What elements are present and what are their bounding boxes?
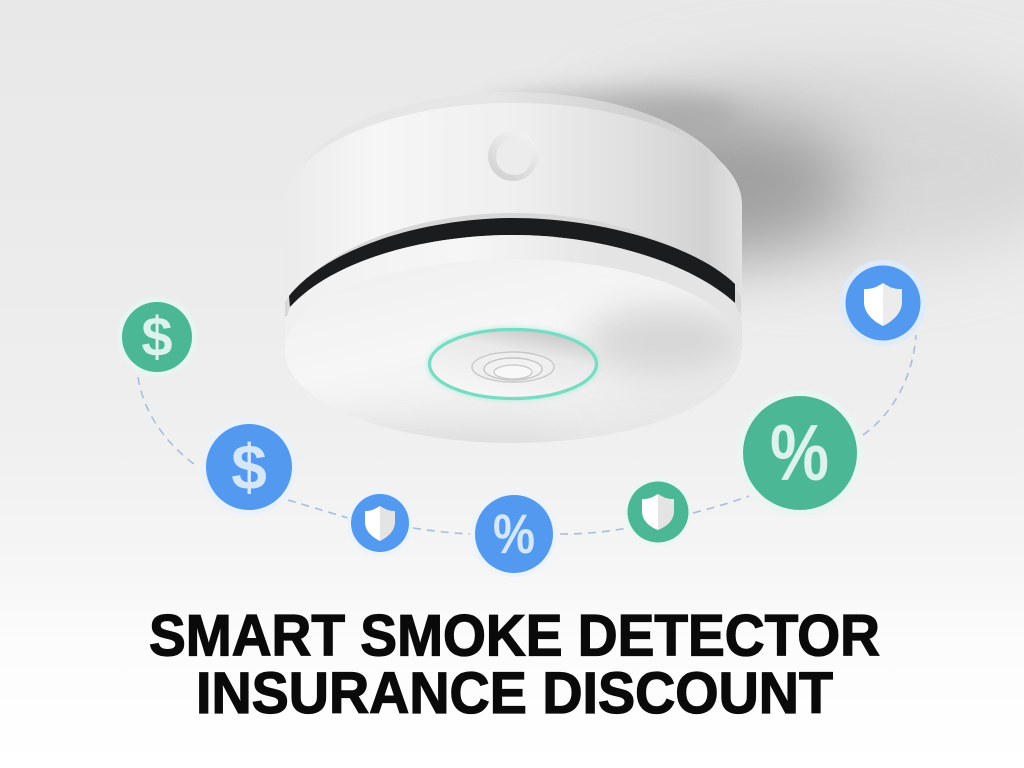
icon: blue percent (471, 491, 557, 577)
status ring (430, 330, 596, 398)
black vent band (289, 218, 735, 307)
title line 1: SMART SMOKE DETECTOR (149, 604, 880, 668)
base disc (326, 261, 740, 443)
status ring glow (428, 328, 598, 400)
collar under band (285, 235, 742, 350)
icon: green dollar: $ (141, 305, 173, 368)
detector body (285, 103, 742, 318)
dashed connector path (138, 335, 916, 534)
vent band highlight (285, 213, 741, 316)
title line 2: INSURANCE DISCOUNT (196, 661, 833, 726)
icon: large green percent: % (770, 408, 829, 497)
smoke detector (285, 92, 742, 443)
sensor centre (431, 330, 595, 398)
ceiling shadow (480, 65, 1024, 265)
icon: small blue shield (347, 490, 413, 556)
icon: large green percent (737, 390, 863, 516)
test button (488, 131, 538, 181)
title (149, 604, 880, 726)
icon: top blue shield (840, 260, 926, 346)
detector rim (291, 92, 735, 308)
icon: small green shield (624, 478, 692, 546)
icon: blue percent: % (493, 502, 535, 565)
icon: green dollar (117, 297, 197, 377)
icon: blue dollar (201, 419, 297, 515)
icon: blue dollar: $ (231, 431, 267, 503)
